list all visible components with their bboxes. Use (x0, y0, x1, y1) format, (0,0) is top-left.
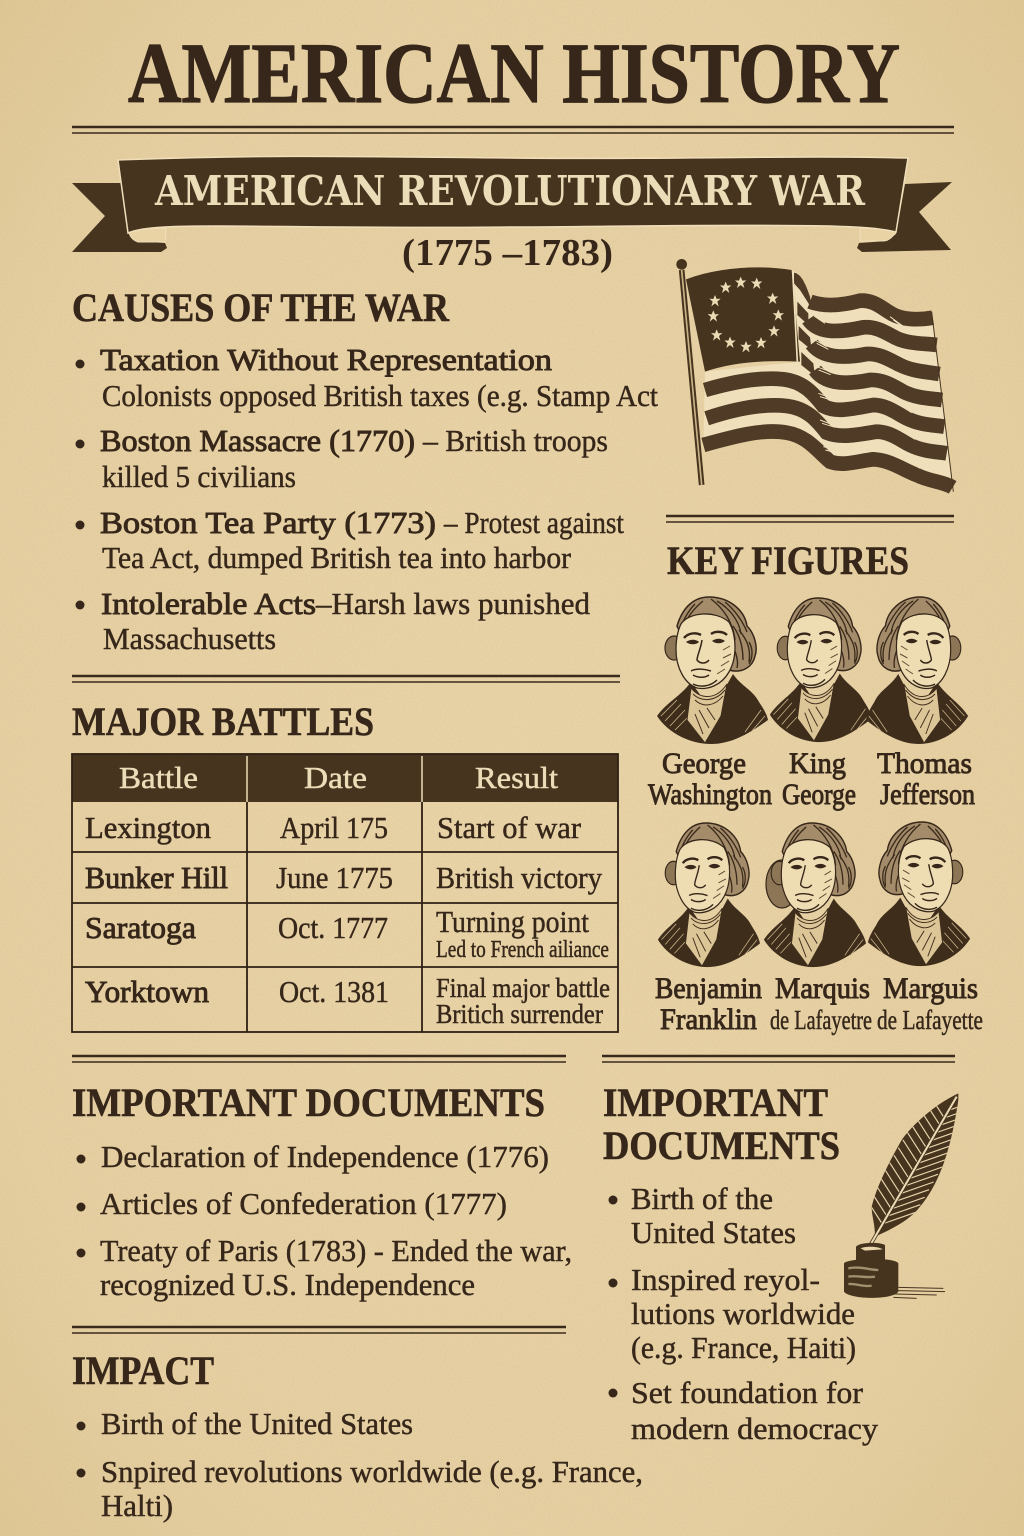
heading: impact: IMPACT (72, 1348, 214, 1393)
portrait: Benjamin Franklin: Franklin (660, 1003, 757, 1036)
portrait: Marguis de Lafayette (868, 822, 983, 1035)
document: Treaty of Paris: recognized U.S. Independence (100, 1267, 475, 1302)
row: Saratoga: Saratoga (85, 910, 196, 945)
portrait: Marquis de Lafayette: Marquis (775, 972, 870, 1005)
document: Declaration of Independence: Declaration of Independence (1776) (101, 1139, 549, 1174)
heading: key figures: KEY FIGURES (667, 538, 909, 583)
cause: Boston Massacre (76, 423, 608, 494)
impact: revolutions worldwide: Halti) (101, 1488, 173, 1523)
heading: causes: CAUSES OF THE WAR (72, 285, 450, 330)
row: Yorktown: Britich surrender (436, 999, 603, 1029)
panel: causes of the war (72, 285, 658, 656)
row: Yorktown: Final major battle (436, 973, 610, 1003)
portrait: King George (770, 598, 872, 811)
panel: important documents (72, 1080, 572, 1302)
cause: Boston Tea Party: Boston Tea Party (1773) (100, 505, 436, 540)
item: birth of the United States: Birth of the (631, 1181, 773, 1216)
cause: Intolerable Acts (76, 586, 590, 656)
row: Saratoga: Oct. 1777 (278, 910, 388, 945)
item: foundation for democracy (608, 1375, 879, 1446)
cause: Intolerable Acts: Massachusetts (103, 621, 276, 656)
portrait: Marguis de Lafayette: de Lafayette (877, 1005, 983, 1035)
portrait: Benjamin Franklin: Benjamin (655, 972, 762, 1005)
icon: quill and inkwell (844, 1093, 958, 1299)
icon: waving colonial flag (676, 259, 953, 492)
cause: Boston Tea Party (76, 505, 624, 575)
portrait: George Washington (648, 597, 772, 811)
portrait: King George: George (782, 778, 856, 811)
heading: major battles: MAJOR BATTLES (72, 699, 374, 744)
heading: important documents: IMPORTANT DOCUMENTS (72, 1080, 545, 1125)
item: inspired revolutions: Inspired reyol- (631, 1262, 820, 1297)
item: birth of the United States: United States (631, 1215, 796, 1250)
row: Yorktown: Yorktown (85, 974, 210, 1009)
item: inspired revolutions (608, 1262, 856, 1365)
document: Articles of Confederation: Articles of Confederation (1777) (100, 1186, 507, 1221)
row: Bunker Hill: June 1775 (276, 860, 393, 895)
cause: taxation (76, 342, 658, 413)
row: Bunker Hill (85, 860, 602, 895)
table: major battles (72, 754, 618, 1032)
cause: Boston Massacre: Boston Massacre (1770) (100, 423, 415, 458)
row: Saratoga: Led to French ailiance (436, 937, 609, 963)
cause: taxation: Colonists opposed British taxes (e.g. Stamp Act (102, 378, 658, 413)
row: Lexington: April 175 (280, 810, 388, 845)
row: Lexington: Lexington (85, 810, 211, 845)
impact: birth of the United States: Birth of the United States (101, 1406, 413, 1441)
document: Treaty of Paris (76, 1233, 572, 1302)
banner: American Revolutionary War: AMERICAN REVOLUTIONARY WAR (154, 167, 866, 215)
impact: revolutions worldwide: Snpired revolutions worldwide (e.g. France, (101, 1454, 643, 1489)
heading: important documents right: IMPORTANT (603, 1080, 828, 1125)
portrait: Thomas Jefferson (866, 597, 975, 811)
banner: American Revolutionary War (72, 156, 952, 252)
portrait: George Washington: Washington (648, 778, 772, 811)
cause: Intolerable Acts: Intolerable Acts (101, 586, 316, 621)
table header: Battle (119, 760, 198, 795)
row: Yorktown (85, 973, 610, 1029)
row: Saratoga (85, 904, 609, 963)
table header (72, 754, 618, 802)
item: inspired revolutions: lutions worldwide (631, 1296, 855, 1331)
cause: Boston Massacre: killed 5 civilians (102, 459, 296, 494)
portrait: Marguis de Lafayette: Marguis (883, 972, 978, 1005)
flag pole (682, 270, 702, 485)
portrait: George Washington: George (662, 747, 746, 780)
item: birth of the United States (608, 1181, 796, 1250)
portrait: King George: King (789, 747, 846, 780)
item: inspired revolutions: (e.g. France, Haiti) (631, 1330, 856, 1365)
document: Treaty of Paris: Treaty of Paris (1783) - Ended the war, (100, 1233, 572, 1268)
row: Yorktown: Oct. 1381 (279, 974, 389, 1009)
banner dates: (1775 –1783) (402, 232, 613, 274)
panel: key figures portraits (648, 597, 983, 1036)
row: Lexington (85, 810, 582, 845)
item: foundation for democracy: modern democracy (631, 1411, 879, 1446)
panel: right column important documents (603, 1080, 879, 1446)
cause: Intolerable Acts: –Harsh laws punished (315, 586, 590, 621)
item: foundation for democracy: Set foundation for (631, 1375, 864, 1410)
portrait: Benjamin Franklin (655, 823, 762, 1036)
cause: Boston Tea Party: Tea Act, dumped British tea into harbor (102, 540, 572, 575)
portrait: Marquis de Lafayette: de Lafayetre (770, 1005, 872, 1035)
row: Lexington: Start of war (437, 810, 582, 845)
title: AMERICAN HISTORY (128, 25, 900, 121)
cause: Boston Massacre: – British troops (422, 423, 608, 458)
row: Bunker Hill: Bunker Hill (85, 860, 228, 895)
portrait: Thomas Jefferson: Jefferson (880, 778, 975, 811)
cause: Boston Tea Party: – Protest against (443, 505, 624, 540)
table header: Result (475, 760, 558, 795)
impact: revolutions worldwide (76, 1454, 643, 1523)
heading: important documents right: DOCUMENTS (603, 1123, 840, 1168)
portrait: Thomas Jefferson: Thomas (877, 747, 972, 780)
row: Bunker Hill: British victory (436, 860, 602, 895)
panel: impact (72, 1348, 643, 1523)
row: Saratoga: Turning point (436, 904, 589, 939)
table header: Date (304, 760, 367, 795)
heading: important documents right (603, 1080, 840, 1168)
cause: taxation: Taxation Without Representation (100, 342, 553, 377)
portrait: Marquis de Lafayette (764, 823, 872, 1035)
